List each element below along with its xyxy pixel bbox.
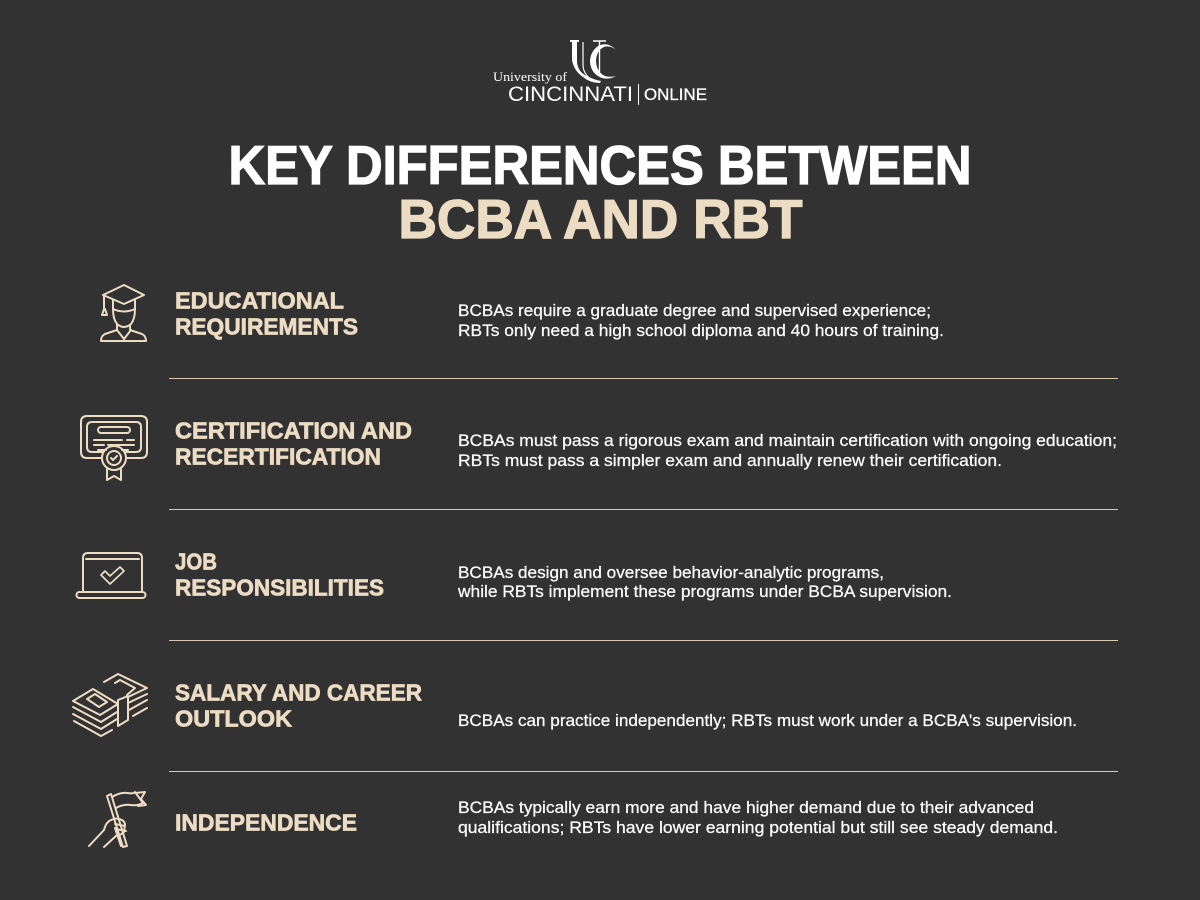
icon: certificate (81, 416, 147, 480)
title: BCBA AND RBT (398, 188, 802, 250)
logo: University of Cincinnati Online: CINCINNATI (508, 83, 633, 106)
description (458, 302, 944, 340)
row: job responsibilities (76, 548, 952, 601)
title: KEY DIFFERENCES BETWEEN (228, 134, 972, 196)
description (457, 564, 952, 601)
heading (175, 417, 412, 470)
heading: JOB (175, 548, 217, 574)
icon: laptop with check (76, 553, 146, 598)
heading (175, 548, 384, 600)
description: RBTs must pass a simpler exam and annually renew their certification. (458, 452, 1002, 470)
heading (175, 679, 422, 732)
row: certification and recertification (81, 416, 1117, 480)
row: educational requirements (101, 285, 944, 341)
heading: REQUIREMENTS (175, 314, 358, 340)
row: salary and career outlook (73, 674, 1077, 736)
icon: hand holding flag (89, 792, 146, 847)
logo: University of Cincinnati Online: ONLINE (644, 86, 707, 104)
description: BCBAs design and oversee behavior-analytic programs, (458, 564, 884, 582)
heading: RECERTIFICATION (175, 444, 381, 470)
icon: graduate with cap (101, 285, 146, 341)
heading (175, 287, 358, 340)
heading: RESPONSIBILITIES (175, 574, 384, 600)
logo: University of Cincinnati Online (493, 40, 707, 106)
heading: CERTIFICATION AND (175, 417, 412, 443)
description (458, 432, 1117, 470)
title (228, 134, 972, 250)
heading: SALARY AND CAREER (175, 679, 422, 705)
icon: stacks of money (73, 674, 147, 736)
description: qualifications; RBTs have lower earning potential but still see steady demand. (458, 819, 1058, 837)
description (458, 799, 1058, 837)
description: BCBAs can practice independently; RBTs must work under a BCBA's supervision. (458, 712, 1077, 730)
description: RBTs only need a high school diploma and 40 hours of training. (458, 322, 944, 340)
heading: OUTLOOK (175, 706, 292, 732)
description: BCBAs typically earn more and have higher demand due to their advanced (458, 799, 1034, 817)
description: BCBAs require a graduate degree and supervised experience; (458, 302, 931, 320)
heading: INDEPENDENCE (175, 810, 357, 836)
row: independence (89, 792, 1058, 847)
logo: University of Cincinnati Online: University of (493, 69, 568, 84)
description: while RBTs implement these programs under BCBA supervision. (457, 583, 952, 601)
description: BCBAs must pass a rigorous exam and maintain certification with ongoing education; (458, 432, 1117, 450)
heading: EDUCATIONAL (175, 287, 344, 313)
